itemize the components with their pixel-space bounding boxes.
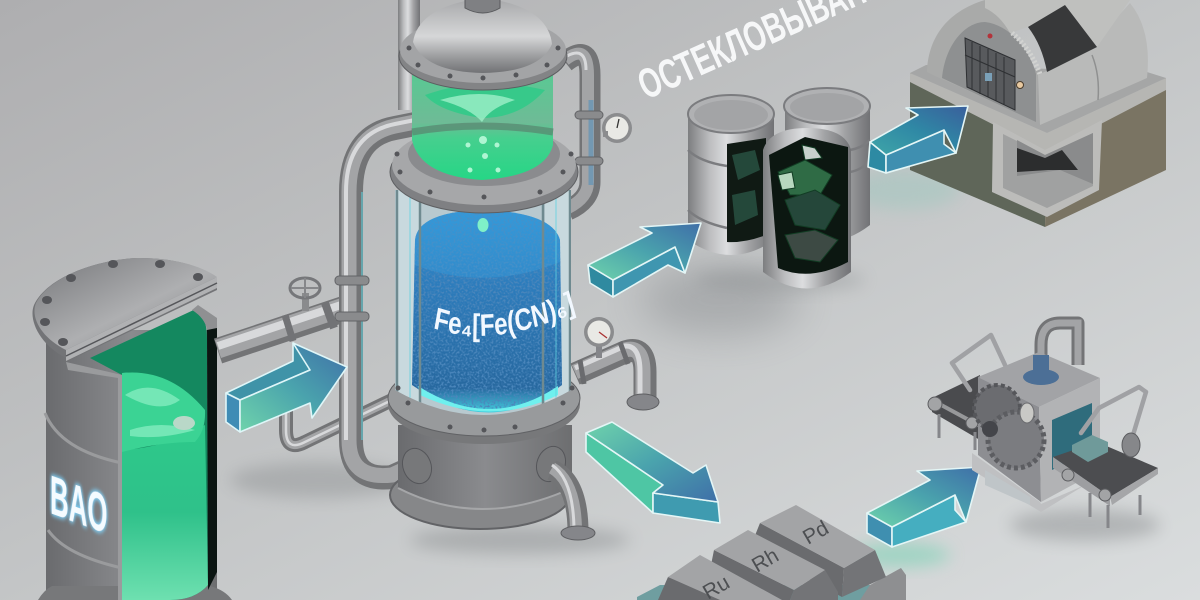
right conveyor — [1053, 442, 1158, 528]
pipe: drum to column with valve — [218, 278, 350, 351]
nozzle: left — [398, 444, 436, 488]
opening with glass shards — [769, 137, 848, 274]
dark vault mouth — [1028, 5, 1097, 72]
drum base flange — [38, 586, 232, 600]
gauge: upper — [602, 113, 632, 143]
pipe: lower right outlet with gauge — [575, 317, 659, 410]
vault opening — [992, 120, 1102, 217]
ingot Pd — [750, 505, 886, 597]
bubbles — [466, 136, 500, 172]
lower flange — [388, 360, 580, 444]
vat: BAO liquid waste drum — [32, 258, 232, 600]
pipe: upper right return — [565, 53, 632, 210]
liquid column — [122, 425, 208, 600]
green glass vessel — [412, 75, 553, 180]
lid bolts — [40, 260, 203, 346]
top flange — [399, 17, 567, 90]
drum back-left — [688, 95, 774, 255]
arrow 3: drums to repository — [868, 106, 968, 173]
collars — [575, 111, 603, 119]
dome right section — [1038, 3, 1148, 125]
label: BAO: BAO — [50, 465, 107, 546]
glass rods — [397, 190, 570, 418]
dome roof — [985, 0, 1130, 47]
right robot arm — [1081, 387, 1146, 445]
processing machine — [928, 323, 1158, 528]
gauge: lower — [584, 317, 614, 358]
pellet bed — [412, 210, 562, 412]
pipe collar — [1023, 355, 1059, 385]
text Pd: Pd — [799, 517, 833, 549]
pipe: back vertical top — [398, 0, 420, 110]
machine top — [978, 352, 1100, 407]
warning sign — [1016, 82, 1024, 88]
arrow 2: column to glass drums — [588, 223, 701, 297]
left robot arm — [952, 335, 1005, 390]
small dial — [1020, 403, 1034, 423]
main glass cylinder — [395, 190, 571, 440]
machine base — [972, 453, 1085, 512]
arrow 1: drum to column — [226, 343, 347, 432]
valve — [290, 278, 320, 311]
product block — [1072, 435, 1108, 462]
pipe: bottom right elbow — [552, 465, 595, 540]
arch serration — [1012, 33, 1040, 74]
pellet texture — [410, 205, 565, 410]
dome cap — [413, 0, 552, 73]
drum back-right — [784, 88, 870, 242]
alarm light — [988, 34, 992, 38]
opening — [727, 138, 766, 242]
drum black rim — [207, 326, 217, 590]
machine back pipe — [1041, 323, 1078, 370]
slab band — [910, 73, 1166, 152]
robot base — [1122, 433, 1140, 457]
pipe collars — [335, 276, 369, 285]
pipe collars — [285, 315, 293, 341]
drum body — [46, 330, 217, 600]
green liquid surface — [425, 84, 545, 118]
middle flange — [390, 122, 578, 213]
glass-waste drums — [688, 88, 870, 288]
left conveyor — [928, 375, 980, 450]
liquid surface — [122, 372, 205, 452]
floor shadows and glows — [230, 170, 1160, 567]
slab top — [910, 65, 1166, 133]
repository bunker — [910, 0, 1166, 227]
pipe: main left vertical — [335, 118, 425, 478]
green interior wall — [90, 308, 208, 600]
dome arch outer ring — [927, 0, 1040, 122]
dome arch inner face — [942, 22, 1036, 122]
dome neck — [465, 0, 500, 13]
cut edge front panel — [66, 362, 122, 600]
arrow 5: metals to processing machine — [867, 467, 981, 547]
drum front cut-open — [763, 128, 851, 288]
tray — [637, 568, 906, 600]
ingot Rh — [704, 530, 838, 600]
nozzle: right — [532, 442, 570, 486]
drum lid — [32, 258, 217, 362]
gears — [974, 385, 1044, 468]
steel door — [965, 38, 1015, 110]
reactor column — [245, 0, 620, 530]
machine right face — [1039, 378, 1100, 502]
machine outlet — [1052, 403, 1092, 470]
ingot Ru — [658, 555, 782, 600]
lower flange bolts — [396, 386, 574, 432]
block left face — [910, 73, 1047, 227]
text Rh: Rh — [748, 544, 783, 577]
arrow 4: column to metals — [586, 422, 720, 523]
pipe: back U pipe — [286, 400, 392, 445]
reactor base — [390, 425, 572, 529]
glow at bed bottom — [418, 386, 558, 412]
drum ribs — [45, 413, 122, 568]
block right face — [1045, 78, 1166, 227]
metal ingots on tray — [637, 505, 906, 600]
machine left face — [978, 377, 1041, 502]
glowing drop — [478, 218, 488, 232]
